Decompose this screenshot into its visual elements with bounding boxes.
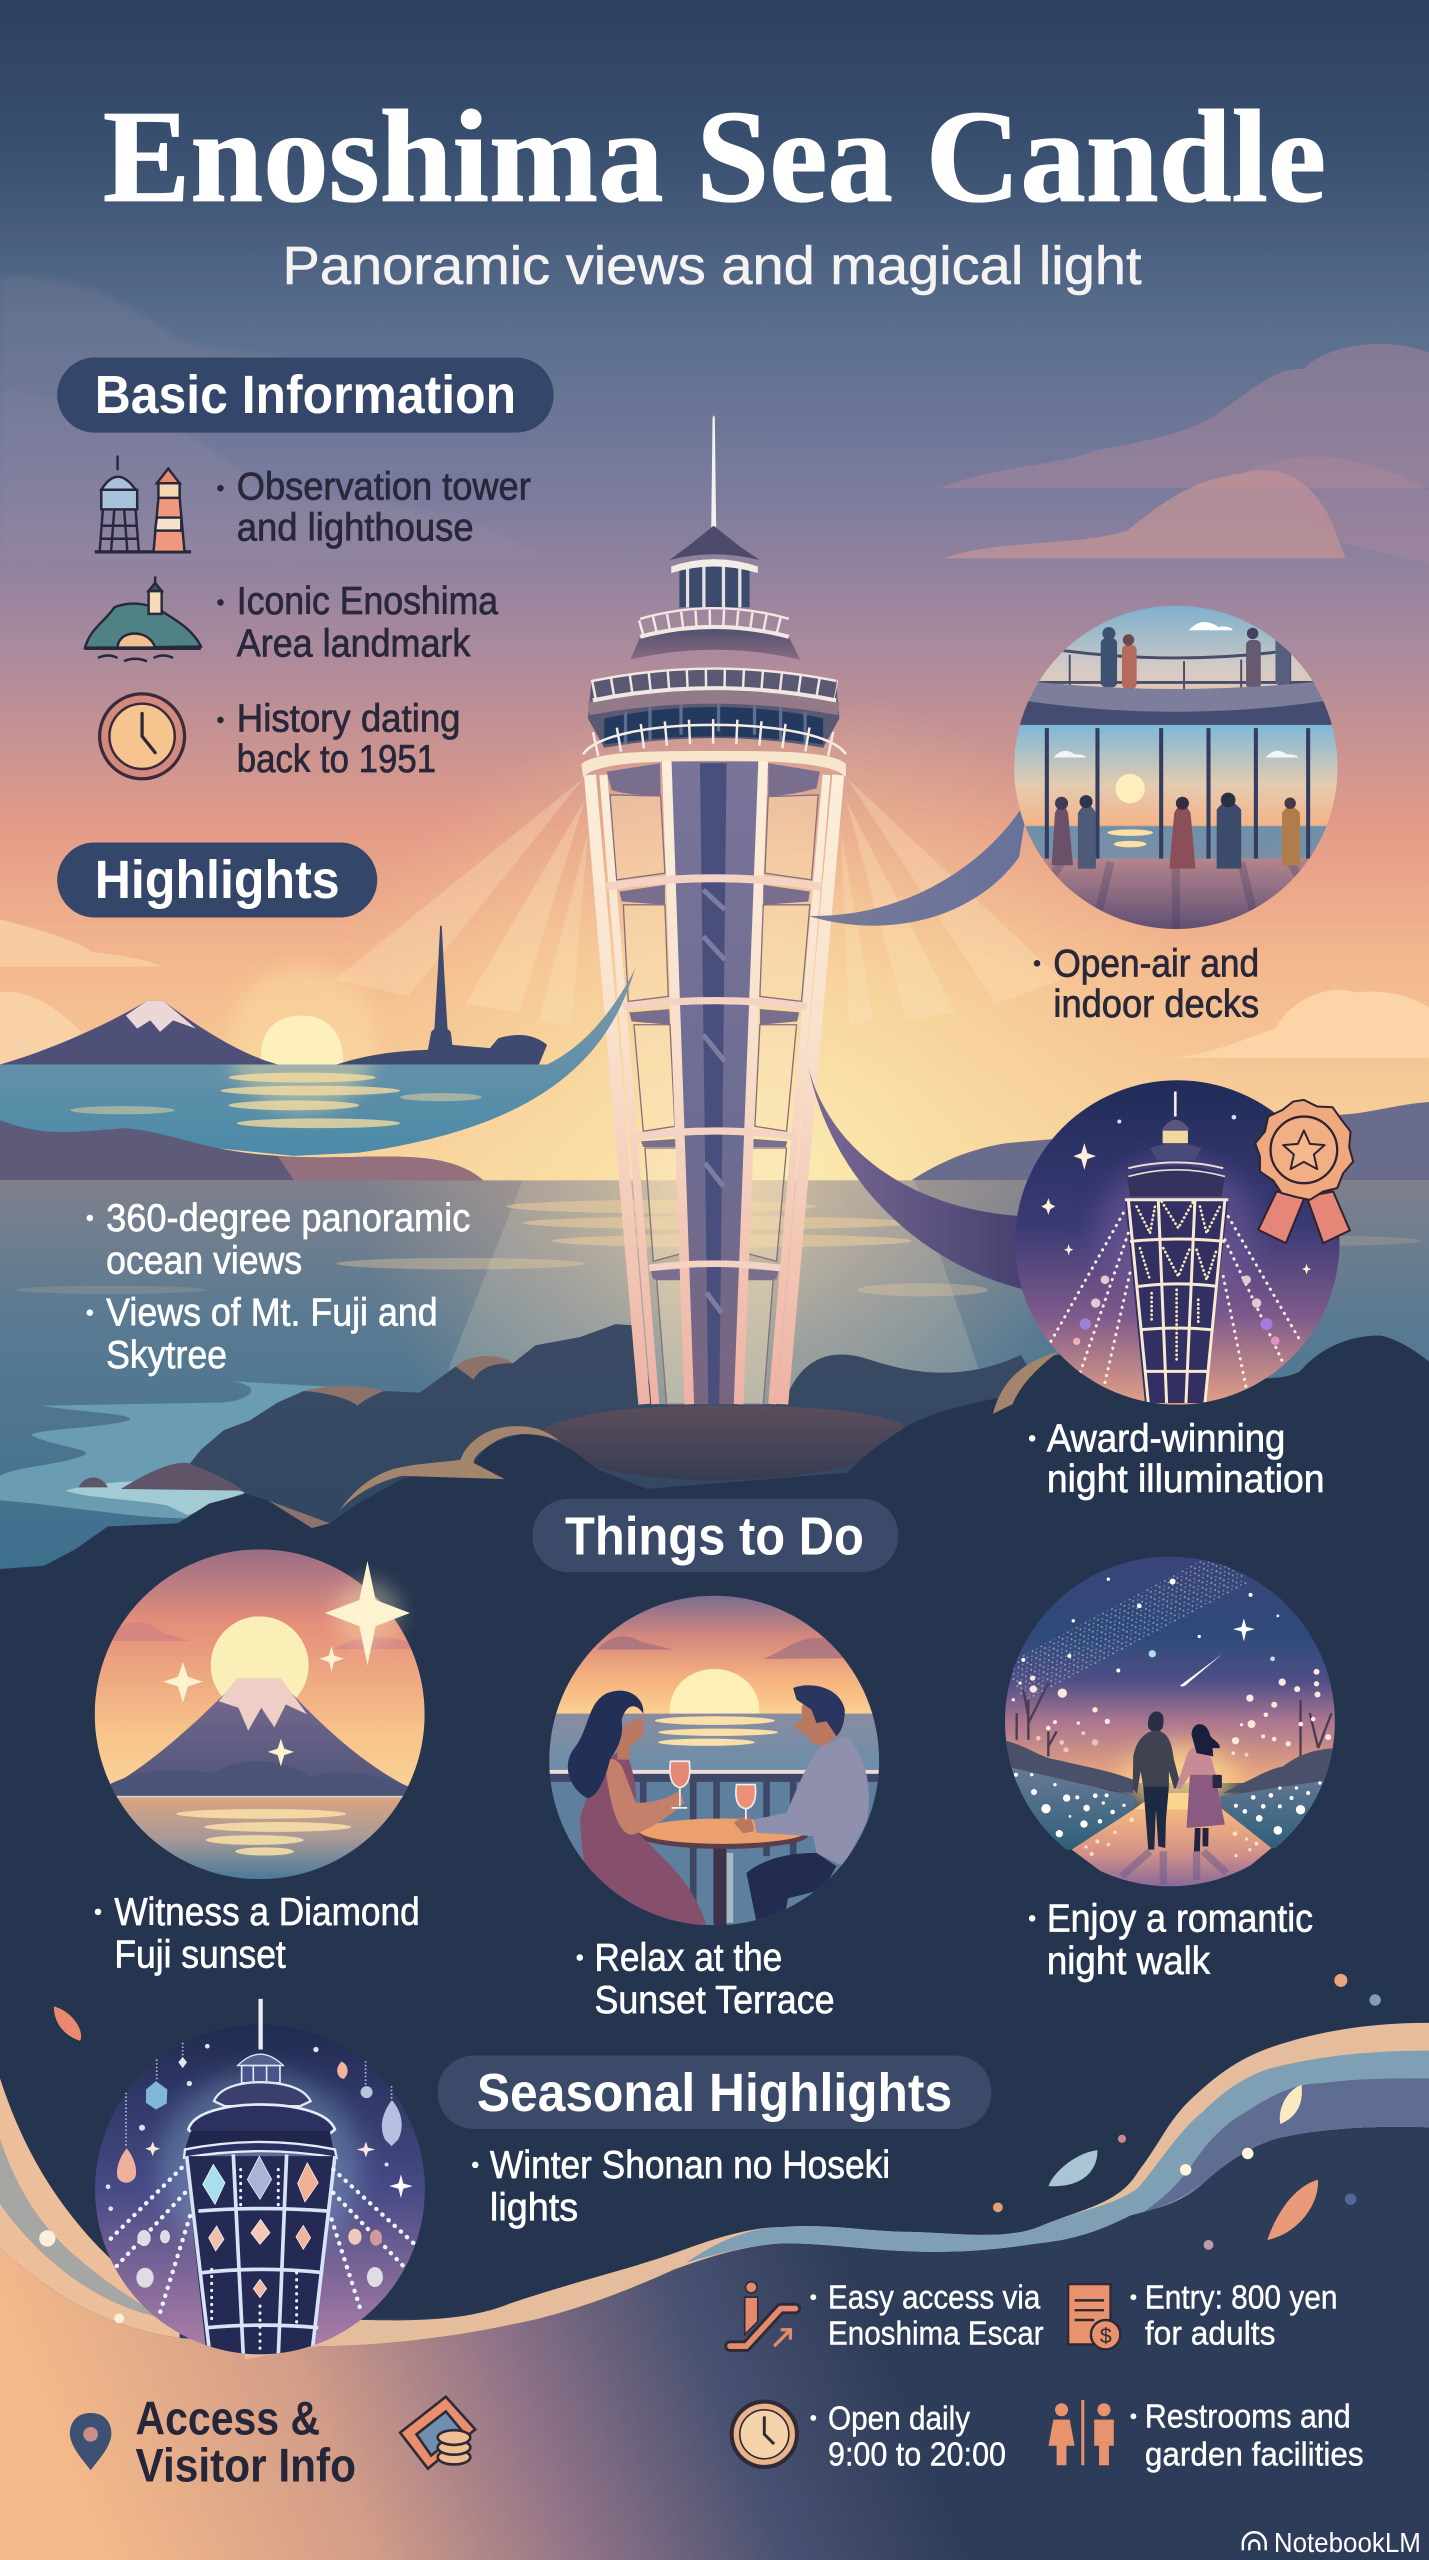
wave ribbon bbox=[0, 2023, 1429, 2359]
big sparkle bbox=[325, 1561, 410, 1665]
hill highlight bands bbox=[340, 1352, 1058, 1510]
sea stack islets bbox=[78, 1463, 243, 1491]
man bbox=[1133, 1711, 1181, 1850]
text: observation tower: and lighthouse bbox=[237, 506, 474, 549]
sea channel bbox=[0, 1381, 376, 1518]
lower balcony bbox=[583, 725, 846, 754]
illustration: Sunset Terrace bbox=[547, 1595, 883, 1926]
icon: restrooms bbox=[1048, 2400, 1114, 2465]
icon: receipt bbox=[1068, 2284, 1120, 2349]
glow around mini tower bbox=[1097, 1160, 1257, 1306]
section: Basic Information bbox=[57, 358, 554, 781]
lower figures bbox=[1052, 793, 1300, 869]
path bbox=[1072, 1810, 1272, 1888]
text: facilities bbox=[1130, 2399, 1364, 2473]
clouds: upper right bbox=[939, 344, 1429, 563]
icon: clock bbox=[100, 694, 185, 779]
text: night walk: night walk bbox=[1047, 1940, 1211, 1983]
ribbon tan layer bbox=[245, 2023, 1429, 2359]
icon: opening-hours clock bbox=[732, 2402, 797, 2467]
text: opening hours bbox=[810, 2400, 1006, 2473]
subtitle: Panoramic views and magical light bbox=[283, 236, 1142, 296]
upper cone bbox=[630, 625, 800, 660]
text: night illumination bbox=[1029, 1417, 1324, 1501]
text: Diamond Fuji: Witness a Diamond bbox=[114, 1891, 420, 1934]
text: iconic landmark bbox=[217, 580, 498, 665]
milky way bbox=[1012, 1561, 1247, 1702]
text: history bbox=[217, 697, 461, 781]
spire bbox=[711, 416, 716, 527]
illustration: romantic night walk bbox=[1000, 1546, 1336, 1888]
text: winter lights: lights bbox=[490, 2186, 578, 2229]
inset: sunset panorama bbox=[0, 926, 635, 1156]
text: night walk: Enjoy a romantic bbox=[1047, 1897, 1313, 1940]
text: opening hours: 9:00 to 20:00 bbox=[828, 2436, 1006, 2473]
text: decks: indoor decks bbox=[1053, 983, 1259, 1026]
text: highlights list bbox=[87, 1197, 470, 1377]
mid hills bbox=[188, 1324, 1062, 1567]
text: Sunset Terrace: Relax at the bbox=[594, 1937, 782, 1980]
heading: Things to Do: Things to Do bbox=[565, 1506, 864, 1566]
upper figures bbox=[1100, 627, 1290, 688]
railing bbox=[547, 1772, 883, 1925]
clouds: mid right bbox=[1173, 990, 1429, 1058]
tower island base bbox=[543, 1406, 904, 1481]
tower lattice bbox=[590, 760, 838, 1404]
clouds: upper left bbox=[0, 276, 547, 562]
heading: Highlights bbox=[57, 842, 377, 918]
section: access and visitor info bbox=[70, 2280, 1364, 2493]
swoosh: night connector bbox=[808, 1068, 1026, 1290]
tower bbox=[581, 416, 846, 1404]
illustration: winter jewel tower bbox=[95, 1999, 425, 2356]
inset sun bbox=[229, 967, 376, 1113]
rings bbox=[607, 878, 822, 1268]
text: facilities: garden facilities bbox=[1145, 2436, 1364, 2473]
heading: Access and Visitor Info bbox=[136, 2392, 356, 2493]
clouds: mid left bbox=[0, 919, 163, 1064]
light rays from the tower bbox=[335, 777, 1062, 1025]
main body bbox=[588, 668, 839, 748]
icon: island landmark bbox=[85, 576, 201, 661]
window panels bbox=[610, 795, 818, 1404]
light column over the sea bbox=[425, 1180, 996, 1453]
heading: Access and Visitor Info: Visitor Info bbox=[136, 2440, 356, 2493]
glow on horizon bbox=[1123, 1746, 1237, 1813]
gems on tower bbox=[203, 2156, 318, 2298]
text: highlights list: Views of Mt. Fuji and bbox=[106, 1292, 438, 1335]
roof bbox=[670, 526, 759, 560]
text: history: History dating bbox=[237, 697, 461, 740]
ribbon mauve layer bbox=[1143, 2078, 1429, 2212]
ribbon left end bbox=[0, 2078, 180, 2338]
text: facilities: Restrooms and bbox=[1145, 2399, 1351, 2436]
text: night illumination: Award-winning bbox=[1047, 1417, 1285, 1460]
central shaft bbox=[672, 762, 758, 1404]
deck railing bbox=[1035, 647, 1316, 689]
inset water bbox=[0, 968, 635, 1156]
man bbox=[734, 1685, 869, 1923]
text: easy access bbox=[810, 2280, 1044, 2352]
text: decks bbox=[1034, 942, 1259, 1026]
inset Mt. Fuji bbox=[0, 1001, 278, 1064]
hill tan caps bbox=[268, 1356, 513, 1528]
heading: Basic Information: Basic Information bbox=[95, 365, 516, 425]
text: Diamond Fuji: Fuji sunset bbox=[114, 1933, 286, 1976]
woman bbox=[1176, 1724, 1225, 1851]
text: entry fee: for adults bbox=[1145, 2315, 1275, 2352]
meadows bbox=[1007, 1766, 1330, 1850]
jewel tower body bbox=[184, 2054, 337, 2356]
text: history: back to 1951 bbox=[237, 738, 436, 781]
text: highlights list: Skytree bbox=[106, 1334, 227, 1377]
text: iconic landmark: Area landmark bbox=[237, 622, 471, 665]
deck band bbox=[1027, 682, 1324, 712]
swoosh: decks connector bbox=[808, 797, 1029, 926]
bare trees bbox=[1017, 1683, 1332, 1756]
icon: ticket and coins bbox=[400, 2397, 475, 2469]
windows bbox=[1013, 725, 1339, 859]
walking couple bbox=[1133, 1711, 1225, 1851]
sparkles bbox=[1041, 1115, 1311, 1274]
dark banks bbox=[1000, 1740, 1336, 1793]
icon: location pin bbox=[70, 2413, 111, 2470]
text: Sunset Terrace: Sunset Terrace bbox=[594, 1979, 835, 2022]
bottom background bbox=[0, 2127, 1429, 2560]
mini tower bbox=[1125, 1092, 1228, 1403]
text: night walk bbox=[1029, 1897, 1313, 1983]
ribbon blue layer bbox=[686, 2051, 1429, 2263]
text: Diamond Fuji bbox=[95, 1891, 420, 1976]
left headland bbox=[0, 1120, 483, 1180]
title: Enoshima Sea Candle bbox=[103, 83, 1326, 230]
text: easy access: Easy access via bbox=[828, 2280, 1041, 2317]
icon: receipt: $ bbox=[1100, 2325, 1112, 2348]
sun glow bbox=[245, 686, 1429, 1184]
upper balcony bbox=[640, 608, 789, 637]
NotebookLM mark: NotebookLM bbox=[1274, 2527, 1421, 2558]
sky background bbox=[0, 0, 1429, 1184]
floor crescents bbox=[607, 763, 820, 1280]
heading: Seasonal Highlights: Seasonal Highlights bbox=[477, 2063, 952, 2123]
text: Sunset Terrace bbox=[576, 1937, 835, 2022]
icon: escalator bbox=[730, 2282, 795, 2346]
text: observation tower: Observation tower bbox=[237, 466, 531, 509]
inset Skytree and city bbox=[336, 926, 547, 1064]
sea bbox=[0, 1180, 1429, 1572]
pale shallows bbox=[65, 1481, 245, 1515]
floor bbox=[1042, 858, 1309, 929]
text: entry fee bbox=[1130, 2280, 1338, 2352]
text: winter lights bbox=[472, 2144, 890, 2229]
distant land right bbox=[911, 1102, 1429, 1180]
lens lights bbox=[1073, 1275, 1280, 1345]
foreground dark hills bbox=[0, 1336, 1429, 2318]
text: iconic landmark: Iconic Enoshima bbox=[237, 580, 498, 623]
text: opening hours: Open daily bbox=[828, 2400, 970, 2437]
wine glasses bbox=[670, 1761, 756, 1820]
hanging shell lights bbox=[136, 2229, 383, 2288]
floating petals and dots bbox=[54, 1974, 1381, 2250]
top drum bbox=[671, 559, 758, 607]
distant lights bbox=[1012, 1669, 1331, 1757]
icon: tower and lighthouse bbox=[95, 456, 191, 552]
text: entry fee: Entry: 800 yen bbox=[1145, 2280, 1338, 2317]
icon: award rosette bbox=[1255, 1100, 1353, 1243]
woman bbox=[568, 1691, 707, 1926]
text: easy access: Enoshima Escar bbox=[828, 2315, 1044, 2352]
heading: Highlights: Highlights bbox=[95, 850, 340, 910]
text: observation tower bbox=[217, 466, 531, 549]
meadow lights bbox=[1014, 1773, 1322, 1837]
heading: Access and Visitor Info: Access & bbox=[136, 2392, 320, 2445]
illustration: Diamond Fuji bbox=[91, 1549, 428, 1879]
illustration: observation decks bbox=[1013, 606, 1339, 931]
inset reflections bbox=[70, 1073, 482, 1128]
light strands bbox=[107, 2168, 415, 2349]
text: decks: Open-air and bbox=[1053, 942, 1259, 985]
text: winter lights: Winter Shonan no Hoseki bbox=[490, 2144, 890, 2187]
table bbox=[638, 1819, 808, 1926]
text: highlights list: 360-degree panoramic bbox=[106, 1197, 470, 1240]
text: night illumination: night illumination bbox=[1047, 1458, 1324, 1501]
illustration: night illumination bbox=[1013, 1077, 1353, 1410]
legs bbox=[590, 760, 838, 1404]
light strands bbox=[1050, 1213, 1302, 1390]
main balcony bbox=[593, 669, 836, 700]
sea light bands bbox=[16, 1200, 1421, 1296]
text: highlights list: ocean views bbox=[106, 1239, 302, 1282]
cream collar bbox=[581, 751, 846, 777]
stars and shooting star bbox=[1021, 1578, 1279, 1686]
hanging gems bbox=[106, 2043, 413, 2211]
